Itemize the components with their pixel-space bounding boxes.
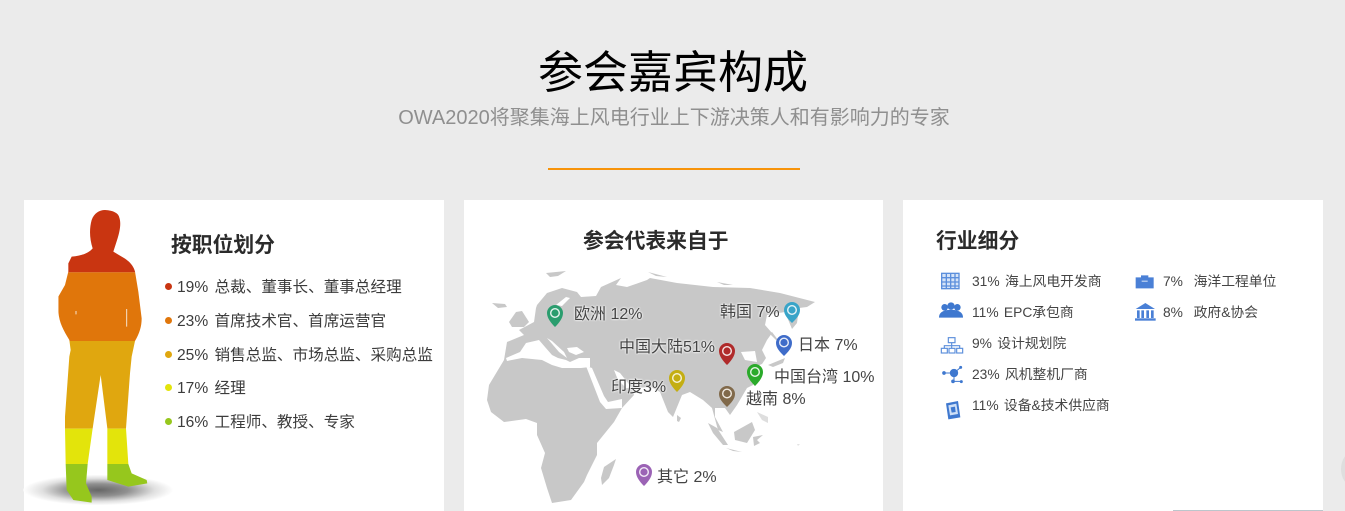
- pin: Vietnam: [719, 386, 735, 407]
- bottom edge strip: [1173, 510, 1323, 511]
- heading: 参会代表来自于: [583, 230, 729, 253]
- pin: mainland China: [719, 343, 735, 365]
- row: 8%: 8% 政府&协会: [1163, 305, 1258, 320]
- panel: delegates origin map: [464, 200, 883, 511]
- pin: Taiwan: [747, 364, 763, 386]
- title: 参会嘉宾构成: [538, 47, 808, 98]
- row: 31%: 31% 海上风电开发商: [972, 274, 1102, 289]
- list item 25%: 25% 销售总监、市场总监、采购总监: [177, 347, 433, 364]
- icon: tablet device: [946, 401, 960, 419]
- pin: India: [669, 370, 685, 392]
- heading: 按职位划分: [171, 234, 275, 257]
- panel: industry breakdown: [903, 200, 1323, 511]
- subtitle: OWA2020将聚集海上风电行业上下游决策人和有影响力的专家: [398, 107, 950, 129]
- icon: briefcase: [1136, 275, 1154, 288]
- pin: Korea: [784, 302, 800, 323]
- label: Europe: 欧洲 12%: [574, 306, 642, 323]
- list item 16%: 16% 工程师、教授、专家: [177, 414, 355, 431]
- seas: [506, 297, 757, 409]
- floating widget edge: [1341, 452, 1345, 486]
- panel: by job position: [24, 200, 444, 511]
- label: other: 其它 2%: [657, 469, 717, 486]
- icon: people: [939, 302, 963, 318]
- list item 17%: 17% 经理: [177, 380, 246, 397]
- pin: other: [636, 464, 652, 486]
- row: 23%: 23% 风机整机厂商: [972, 367, 1088, 382]
- row: 9%: 9% 设计规划院: [972, 336, 1066, 351]
- list item 23%: 23% 首席技术官、首席运营官: [177, 313, 386, 330]
- icon: grid: [942, 273, 959, 289]
- icon: bank: [1135, 303, 1156, 321]
- icon: network nodes: [943, 366, 962, 383]
- row: 11% supplier: 11% 设备&技术供应商: [972, 398, 1110, 413]
- label: mainland China: 中国大陆51%: [619, 339, 715, 356]
- row: 7%: 7% 海洋工程单位: [1163, 274, 1276, 289]
- list item 19%: 19% 总裁、董事长、董事总经理: [177, 279, 402, 296]
- icon: org chart: [941, 338, 963, 353]
- pin: Japan: [776, 335, 792, 356]
- row: 11% EPC: 11% EPC承包商: [972, 305, 1074, 320]
- industry icons: [939, 272, 1156, 420]
- label: Japan: 日本 7%: [798, 337, 858, 354]
- heading: 行业细分: [936, 230, 1019, 253]
- world map: [487, 271, 815, 503]
- label: Korea: 韩国 7%: [720, 304, 780, 321]
- label: Vietnam: 越南 8%: [746, 391, 806, 408]
- pin: Europe: [547, 305, 563, 327]
- orange divider: [548, 168, 800, 170]
- person silhouette chart: [24, 210, 168, 504]
- label: India: 印度3%: [611, 379, 666, 396]
- label: Taiwan: 中国台湾 10%: [774, 369, 874, 386]
